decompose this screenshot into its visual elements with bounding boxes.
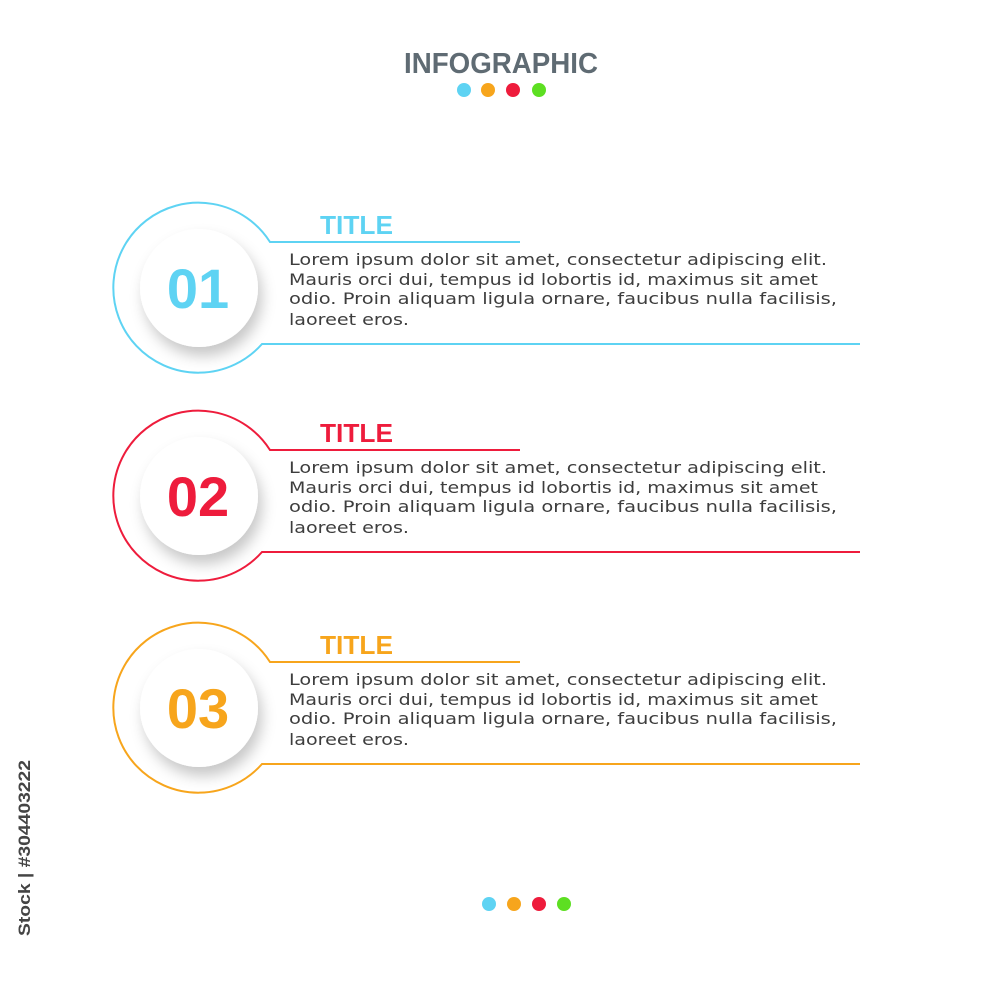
top dots	[457, 83, 546, 97]
number badge: 01	[167, 257, 229, 320]
heading: TITLE	[320, 630, 393, 660]
number badge	[140, 229, 258, 347]
text block: Lorem ipsum dolor sit amet, consectetur adipiscing elit.	[289, 250, 827, 269]
number badge	[140, 649, 258, 767]
text block	[289, 670, 837, 749]
outline	[113, 623, 860, 793]
text block: Lorem ipsum dolor sit amet, consectetur adipiscing elit.	[289, 670, 827, 689]
panel: step 02	[113, 411, 860, 581]
text block: Mauris orci dui, tempus id lobortis id, maximus sit amet	[289, 690, 818, 709]
title: INFOGRAPHIC	[404, 48, 598, 80]
text block: laoreet eros.	[289, 310, 409, 329]
heading: TITLE	[320, 210, 393, 240]
text block	[289, 250, 837, 329]
text block: odio. Proin aliquam ligula ornare, faucibus nulla facilisis,	[289, 709, 837, 728]
text block: Mauris orci dui, tempus id lobortis id, maximus sit amet	[289, 478, 818, 497]
outline	[113, 411, 860, 581]
panel: step 01	[113, 203, 860, 373]
text block: laoreet eros.	[289, 518, 409, 537]
text block: Lorem ipsum dolor sit amet, consectetur adipiscing elit.	[289, 458, 827, 477]
outline	[113, 203, 860, 373]
text block: odio. Proin aliquam ligula ornare, faucibus nulla facilisis,	[289, 497, 837, 516]
heading: TITLE	[320, 418, 393, 448]
number badge	[140, 437, 258, 555]
bottom dots	[482, 897, 571, 911]
panel: step 03	[113, 623, 860, 793]
text block	[289, 458, 837, 537]
text block: Mauris orci dui, tempus id lobortis id, maximus sit amet	[289, 270, 818, 289]
number badge: 02	[167, 465, 229, 528]
text block: odio. Proin aliquam ligula ornare, faucibus nulla facilisis,	[289, 289, 837, 308]
text block: laoreet eros.	[289, 730, 409, 749]
number badge: 03	[167, 677, 229, 740]
side credit: Stock | #304403222	[15, 760, 34, 936]
